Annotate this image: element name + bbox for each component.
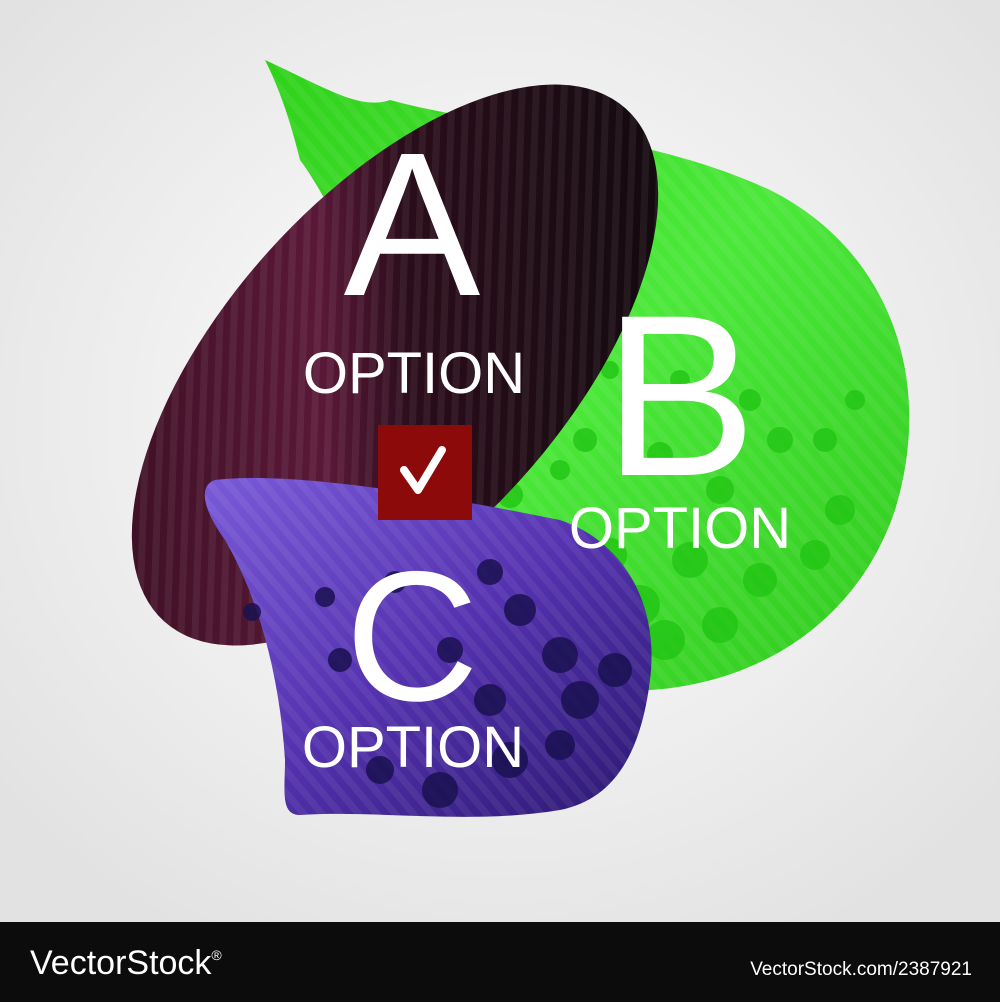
shape: green option B <box>265 60 909 691</box>
footer bar <box>0 922 1000 1002</box>
footer bar: VectorStock <box>30 944 211 982</box>
label A: OPTION <box>303 341 525 406</box>
shape: dark ellipse option A <box>38 0 752 735</box>
footer bar: ® <box>211 947 222 963</box>
footer bar: VectorStock.com/2387921 <box>750 959 972 980</box>
label A <box>303 110 525 406</box>
label C <box>302 534 524 780</box>
icon: checkbox <box>378 425 472 520</box>
label C: C <box>345 534 479 740</box>
label C: OPTION <box>302 715 524 780</box>
label A: A <box>344 110 481 339</box>
label B: B <box>603 267 757 524</box>
shape: purple option C <box>205 478 652 817</box>
label B: OPTION <box>569 496 791 561</box>
label B <box>569 267 791 561</box>
